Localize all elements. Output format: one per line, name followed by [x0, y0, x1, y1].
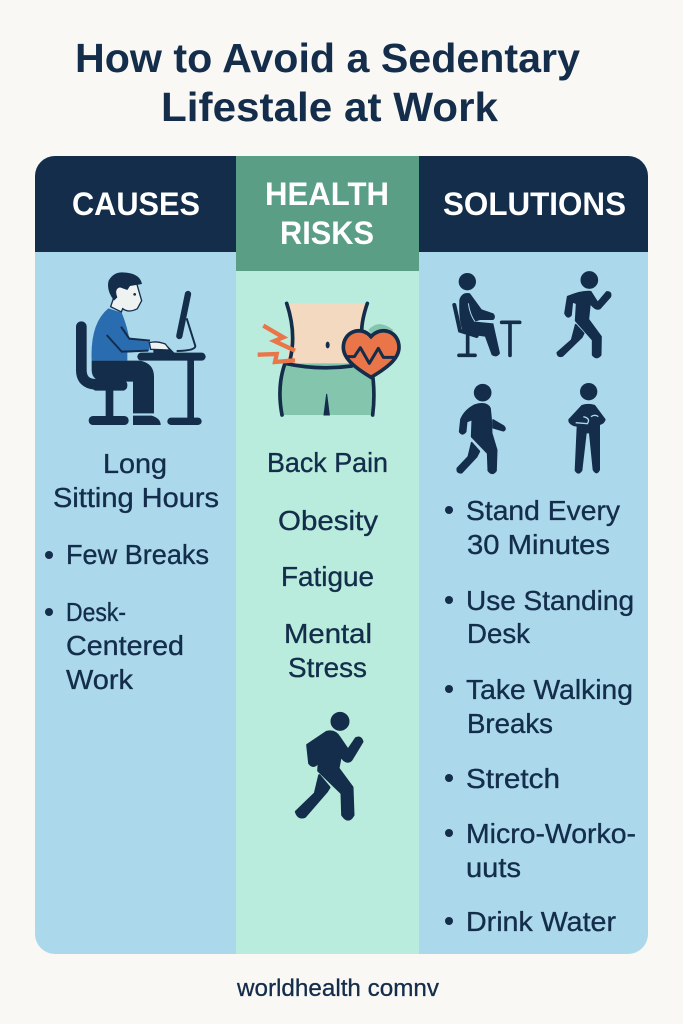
solutions list: Drink Water	[466, 906, 616, 937]
figure: standing stretch	[568, 383, 606, 474]
solutions list: Take Walking	[466, 674, 633, 705]
health risks list: Stress	[288, 652, 367, 683]
icon: person sitting at computer	[81, 272, 206, 425]
solutions list: Use Standing	[466, 585, 634, 616]
solutions list: uuts	[466, 852, 521, 883]
causes list	[45, 448, 219, 695]
title: How to Avoid a Sedentary	[75, 35, 580, 81]
health risks list	[267, 447, 388, 683]
figure: walker	[457, 385, 505, 473]
icon: torso with back pain and heart	[258, 303, 399, 415]
causes list: Work	[66, 664, 134, 695]
health risks header: RISKS	[280, 215, 374, 251]
health risks header	[236, 156, 419, 271]
title	[75, 35, 580, 130]
causes header	[35, 156, 236, 252]
icon: four activity figures	[454, 272, 611, 474]
footer source: worldhealth comnv	[236, 975, 439, 1002]
solutions header	[419, 156, 648, 252]
figure: sitting at desk	[454, 273, 520, 356]
health risks list: Mental	[284, 618, 372, 649]
solutions list: Breaks	[467, 708, 553, 739]
solutions list: Micro-Worko-	[466, 818, 636, 849]
figure: runner	[557, 272, 611, 357]
health risks list: Back Pain	[267, 447, 388, 478]
health risks list: Obesity	[278, 505, 378, 536]
health risks list: Fatigue	[281, 561, 374, 592]
solutions list: Stand Every	[466, 495, 620, 526]
panel: causes	[35, 156, 236, 954]
solutions header: SOLUTIONS	[443, 186, 626, 222]
causes list: Sitting Hours	[53, 482, 219, 513]
solutions list: Stretch	[466, 763, 560, 794]
solutions list	[445, 495, 636, 937]
causes list: Long	[103, 448, 167, 479]
panel: health risks	[236, 156, 419, 954]
causes list: Desk-	[66, 597, 126, 627]
icon: walking figure	[296, 713, 362, 819]
causes header: CAUSES	[72, 186, 200, 222]
panel: solutions	[419, 156, 648, 954]
health risks header: HEALTH	[265, 176, 389, 212]
causes list: Few Breaks	[66, 539, 209, 570]
solutions list: Desk	[467, 618, 531, 649]
causes list: Centered	[66, 630, 184, 661]
solutions list: 30 Minutes	[467, 529, 610, 560]
title: Lifestale at Work	[161, 84, 498, 130]
